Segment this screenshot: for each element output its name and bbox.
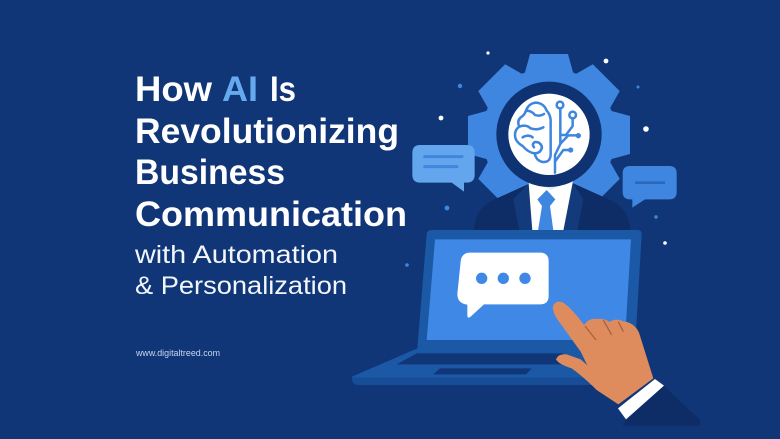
subtitle <box>134 241 347 300</box>
laptop base <box>352 348 593 385</box>
businessman figure <box>474 179 631 231</box>
finger creases <box>585 320 623 340</box>
shirt <box>528 179 573 231</box>
trackpad <box>433 368 532 374</box>
shirt cuff <box>618 379 664 419</box>
typing dots <box>476 273 531 284</box>
subtitle: with Automation <box>134 241 338 269</box>
tie <box>537 190 555 231</box>
lapels <box>513 183 583 231</box>
chat bubble <box>457 253 549 318</box>
screen bezel <box>417 230 642 353</box>
icon: gear <box>468 54 630 210</box>
laptop <box>352 230 642 385</box>
icon: brain <box>515 103 551 162</box>
title: Revolutionizing <box>135 112 399 151</box>
keyboard <box>397 353 570 364</box>
white disc <box>508 94 590 175</box>
title: How <box>135 70 213 109</box>
sparkle dots <box>405 51 667 267</box>
title: Business <box>135 153 285 192</box>
base front shade <box>352 377 593 385</box>
icon: circuit <box>555 102 581 173</box>
head: AI brain circle <box>496 82 602 187</box>
dark ring <box>496 82 602 187</box>
highlighted word: AI: AI <box>222 70 258 109</box>
hand <box>553 302 653 404</box>
title: Communication <box>135 195 407 234</box>
screen <box>427 239 631 340</box>
sleeve <box>623 386 700 426</box>
icon: speech bubble left <box>412 145 475 192</box>
website url: www.digitaltreed.com <box>135 348 220 358</box>
hand pointing <box>553 302 700 426</box>
title: Is <box>270 70 296 109</box>
subtitle: & Personalization <box>135 272 347 300</box>
collar shade <box>531 179 572 190</box>
icon: speech bubble right <box>623 166 677 208</box>
title <box>135 70 407 234</box>
suit <box>474 183 631 231</box>
